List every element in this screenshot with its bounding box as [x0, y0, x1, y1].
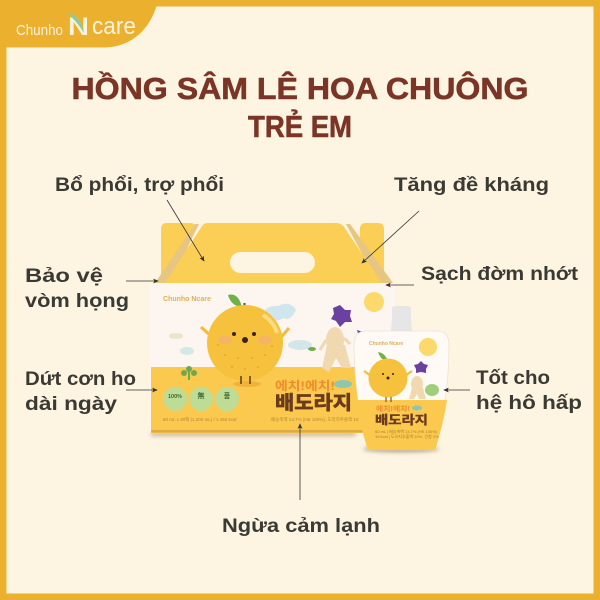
box badges: [163, 387, 239, 411]
box fine print: 60 mL x 30팩 (1,200 mL) / 1 450 kcal: [163, 417, 237, 423]
pouch ginseng: [409, 361, 439, 399]
box moon: [364, 292, 384, 312]
title: HỒNG SÂM LÊ HOA CHUÔNG: [72, 70, 528, 106]
pouch yellow bottom: [356, 400, 447, 450]
logo tab: [0, 0, 158, 48]
label: Tăng đề kháng: Tăng đề kháng: [394, 174, 549, 196]
label: Dứt cơn ho: Dứt cơn ho: [25, 368, 136, 390]
label: Bảo vệ vòm họng: [25, 265, 129, 312]
label: Bảo vệ vòm họng: Bảo vệ: [25, 265, 103, 287]
arrow: Tăng đề kháng: [362, 211, 419, 263]
box badges: 100%: [168, 394, 182, 400]
box handle flap: [155, 223, 393, 283]
pear mascot: [201, 294, 289, 387]
logo text: N: [68, 13, 89, 41]
box Korean name: 배도라지: [275, 392, 352, 414]
label: Tốt cho hệ hô hấp: [476, 367, 582, 414]
box Korean name: 에치!에치!: [275, 379, 335, 393]
label: Bổ phổi: Bổ phổi, trợ phổi: [55, 174, 224, 196]
arrow: Sạch đờm nhớt: [386, 284, 414, 286]
pouch Korean name: [375, 404, 428, 427]
pouch fine print: 60 mL | 배농축액 13.7% (HE 100%): [375, 428, 438, 434]
logo text: Chunho: [16, 23, 63, 39]
arrow: Dứt cơn ho: [126, 389, 157, 391]
arrow: Bổ phổi: [167, 200, 204, 261]
product: pouch: [354, 306, 449, 452]
pouch pear: [364, 352, 412, 402]
pouch shadow: [363, 446, 439, 452]
ginseng mascot: [320, 305, 366, 372]
arrow: Bảo vệ vòm họng: [126, 280, 158, 282]
box badges: 無: [198, 391, 204, 400]
pouch moon: [419, 338, 437, 356]
logo text: [16, 13, 136, 41]
arrow: Tốt cho hệ hô hấp: [444, 389, 470, 391]
label: Dứt cơn ho: [25, 368, 136, 415]
product: gift box: [150, 223, 395, 436]
title: [72, 70, 528, 144]
label: Bảo vệ vòm họng: vòm họng: [25, 290, 129, 312]
box front: [150, 283, 395, 433]
pouch logo: Chunho Ncare: [369, 341, 403, 347]
pouch Korean name: 에치!에치!: [376, 404, 410, 413]
title: TRẺ EM: [248, 109, 352, 144]
labels: [25, 174, 582, 537]
box badges: 품: [224, 392, 231, 400]
label: Tốt cho hệ hô hấp: hệ hô hấp: [476, 392, 582, 414]
arrow: Ngừa cảm lạnh: [299, 424, 301, 500]
label: Sạch đờm nhớt: Sạch đờm nhớt: [421, 263, 579, 285]
box small logo: Chunho Ncare: [163, 296, 211, 303]
label: Tốt cho hệ hô hấp: Tốt cho: [476, 367, 550, 389]
logo text: care: [92, 13, 136, 40]
box fine print: 배농축액 13.7% (HE 100%), 도라지추출액 10: [271, 416, 359, 423]
label: Dứt cơn ho: dài ngày: [25, 393, 117, 415]
pouch fine print: 19 kcal | 도라지추출액 10%, 건청 1%: [375, 433, 439, 439]
cloud: [262, 304, 296, 321]
box yellow band: [151, 367, 395, 433]
box leaves and steam: [169, 333, 316, 380]
pouch body: [354, 331, 449, 450]
pouch Korean name: 배도라지: [375, 413, 428, 427]
pouch fine print: [375, 428, 439, 439]
box Korean name: [275, 379, 352, 414]
box fine print: [163, 416, 359, 423]
pouch cap: [391, 306, 412, 332]
label: Ngừa cảm lạnh: Ngừa cảm lạnh: [222, 515, 380, 537]
box shadow: [151, 432, 356, 436]
